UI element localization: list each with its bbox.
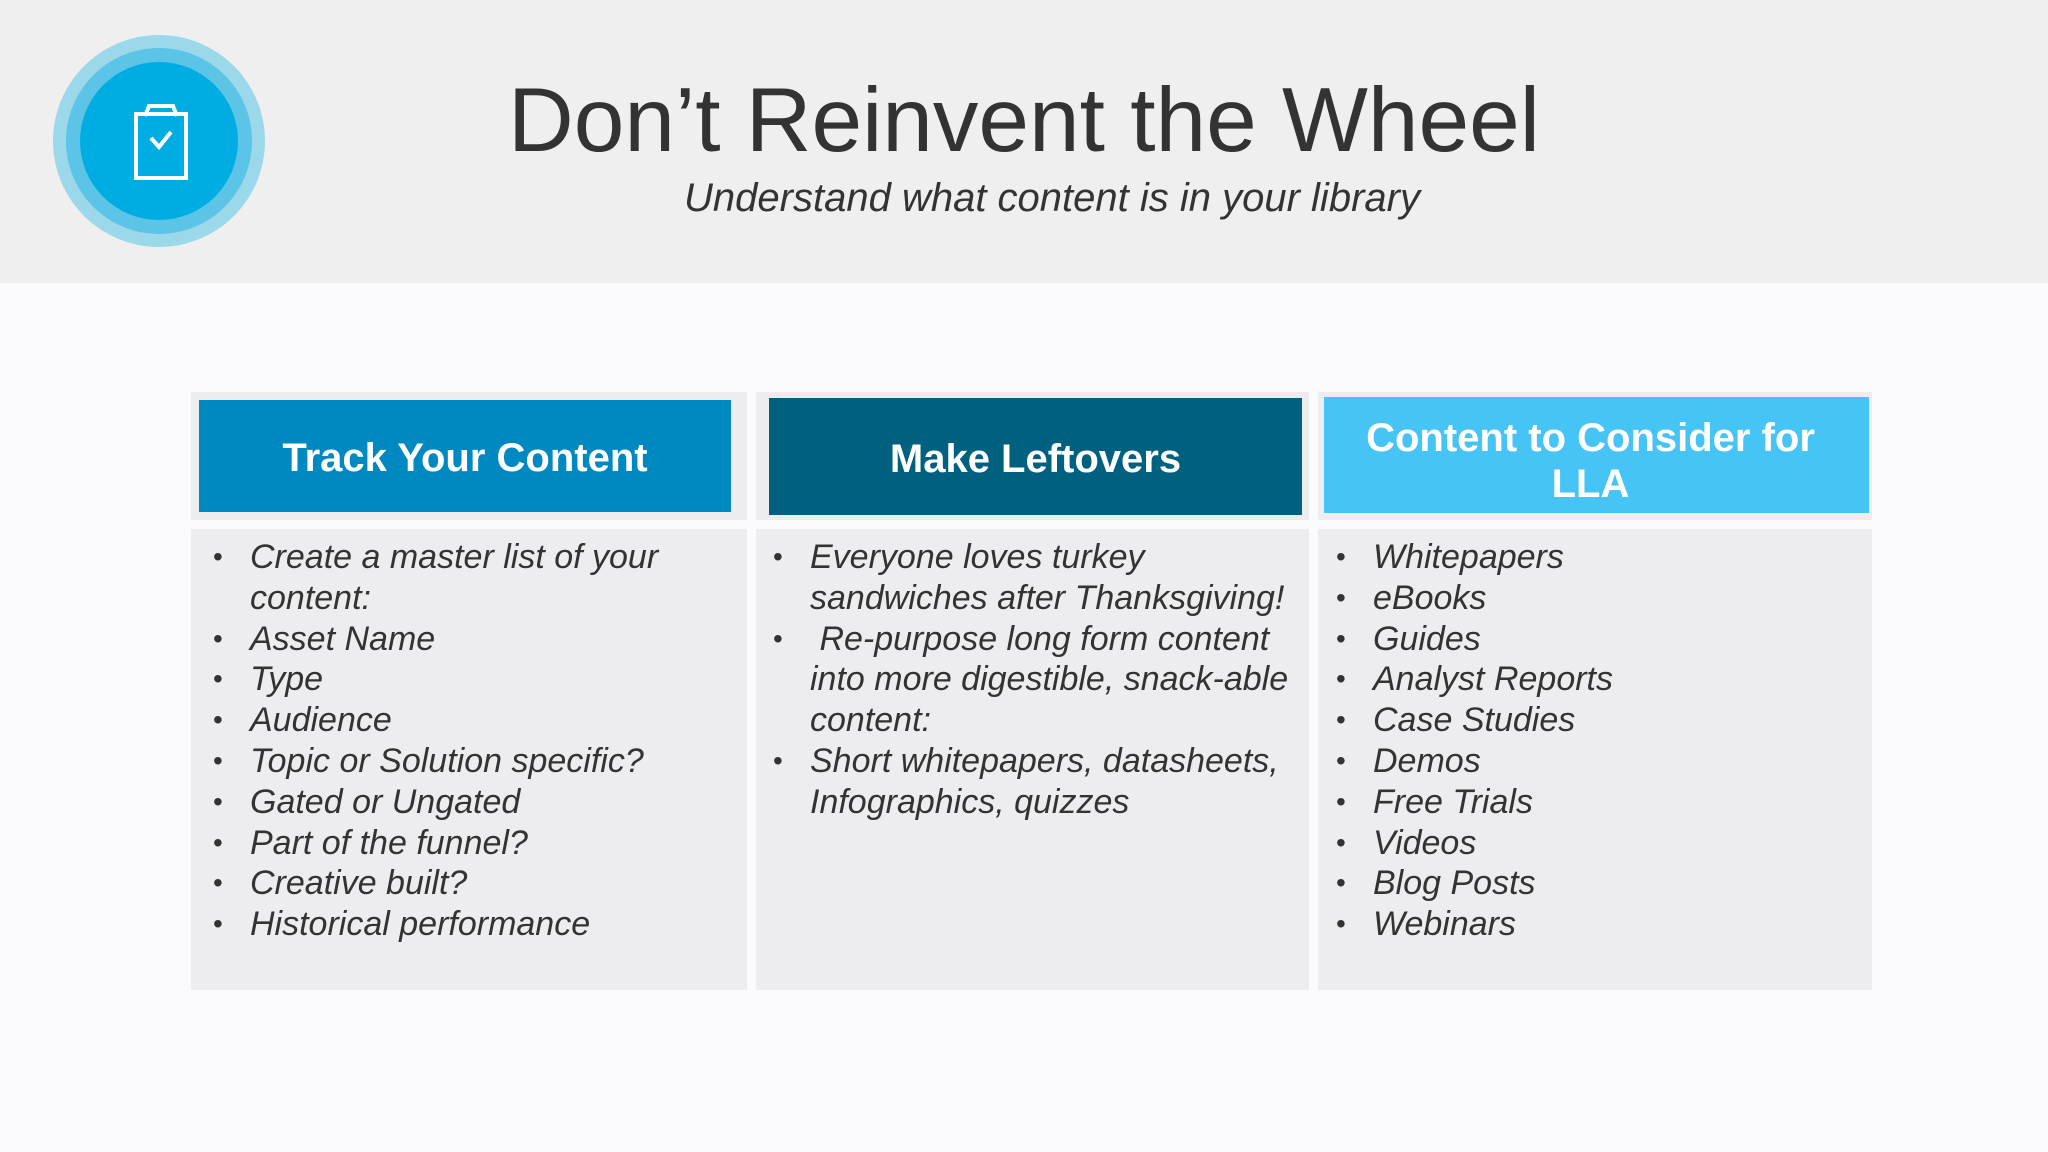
list: leftovers: Everyone loves turkey sandwiches after Thanksgiving! — [810, 538, 1284, 617]
list: content: Whitepapers — [1373, 538, 1564, 576]
icon: clipboard circle — [53, 35, 265, 247]
list: content: eBooks — [1373, 579, 1486, 617]
list: track: Type — [250, 660, 323, 698]
list: content: Webinars — [1373, 905, 1516, 943]
list: track: Create a master list of your content: — [250, 538, 658, 617]
list: track: Part of the funnel? — [250, 824, 528, 862]
heading: Content to Consider for LLA — [1324, 397, 1869, 513]
list: leftovers: Short whitepapers, datasheets, Infographics, quizzes — [810, 742, 1279, 821]
heading: Make Leftovers: Make Leftovers — [890, 436, 1181, 480]
list: content: Videos — [1373, 824, 1476, 862]
heading: Content to Consider for LLA: Content to Consider for — [1366, 416, 1815, 460]
list: content: Analyst Reports — [1373, 660, 1613, 698]
list: content: Case Studies — [1373, 701, 1575, 739]
heading: Track Your Content: Track Your Content — [282, 436, 648, 480]
title: Don’t Reinvent the Wheel — [508, 70, 1540, 171]
list: track: Asset Name — [250, 620, 435, 658]
heading: Track Your Content — [199, 400, 731, 512]
header band — [0, 0, 2048, 283]
list: content: Free Trials — [1373, 783, 1533, 821]
list: content — [1337, 538, 1613, 943]
panel: content to consider — [1318, 392, 1872, 990]
list: track: Topic or Solution specific? — [250, 742, 644, 780]
list: track: Historical performance — [250, 905, 590, 943]
list: track — [214, 538, 660, 943]
list: track: Creative built? — [250, 864, 467, 902]
list: track: Gated or Ungated — [250, 783, 520, 821]
heading: Content to Consider for LLA: LLA — [1552, 462, 1629, 506]
list: content: Blog Posts — [1373, 864, 1536, 902]
heading: Make Leftovers — [769, 398, 1302, 515]
panel: track your content — [191, 392, 747, 990]
list: leftovers: Re-purpose long form content into more digestible, snack-able content: — [810, 620, 1288, 739]
list: content: Demos — [1373, 742, 1481, 780]
panel: make leftovers — [756, 392, 1309, 990]
list: track: Audience — [250, 701, 392, 739]
list: leftovers — [774, 538, 1288, 821]
list: content: Guides — [1373, 620, 1481, 658]
subtitle: Understand what content is in your library — [684, 176, 1420, 220]
